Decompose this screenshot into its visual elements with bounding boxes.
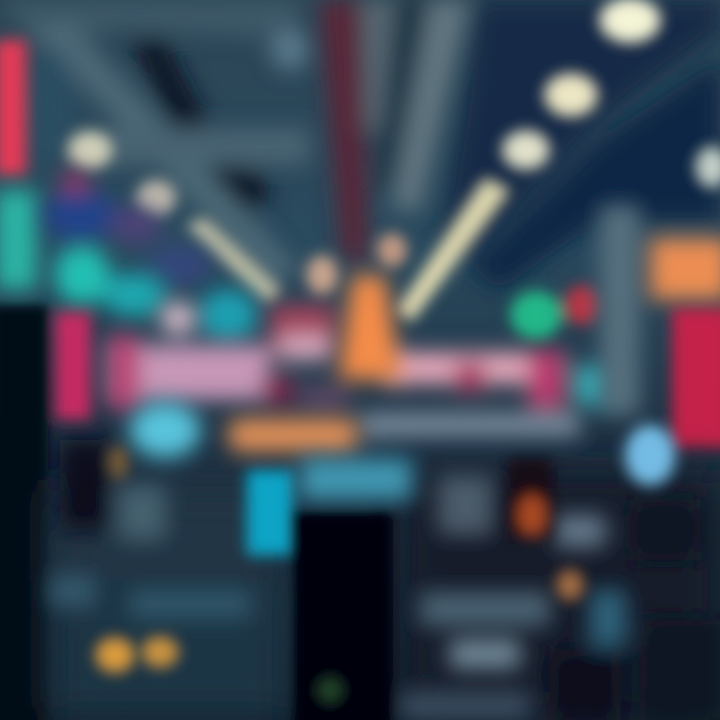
ceiling stripes: red and gray <box>320 0 470 260</box>
dark column left <box>0 305 48 720</box>
green and red balloons <box>510 285 599 339</box>
teal flags <box>54 245 258 341</box>
lower booths <box>50 440 720 720</box>
right sign orange <box>650 238 720 300</box>
cyan panel <box>247 470 293 555</box>
orange counter <box>228 418 358 452</box>
cyan screen <box>300 458 412 500</box>
small orange spots <box>96 445 583 672</box>
dark orange sign <box>508 458 552 538</box>
dark foreground column <box>294 512 392 720</box>
right banner crimson <box>672 308 720 448</box>
right pillar <box>600 205 640 415</box>
light blue globe right <box>625 425 675 485</box>
teal banner <box>0 190 37 290</box>
red banner <box>0 40 26 175</box>
left wall banners <box>0 40 258 420</box>
ceiling lights <box>68 0 720 295</box>
blue and purple flags <box>44 169 212 285</box>
central pink booth band <box>105 302 610 438</box>
ceiling: dark structure and beams <box>0 0 720 290</box>
light blue globe left <box>129 402 201 458</box>
faint green light <box>316 676 344 704</box>
magenta banner <box>55 312 91 420</box>
central orange pillar <box>338 275 402 380</box>
light beams <box>185 178 510 322</box>
